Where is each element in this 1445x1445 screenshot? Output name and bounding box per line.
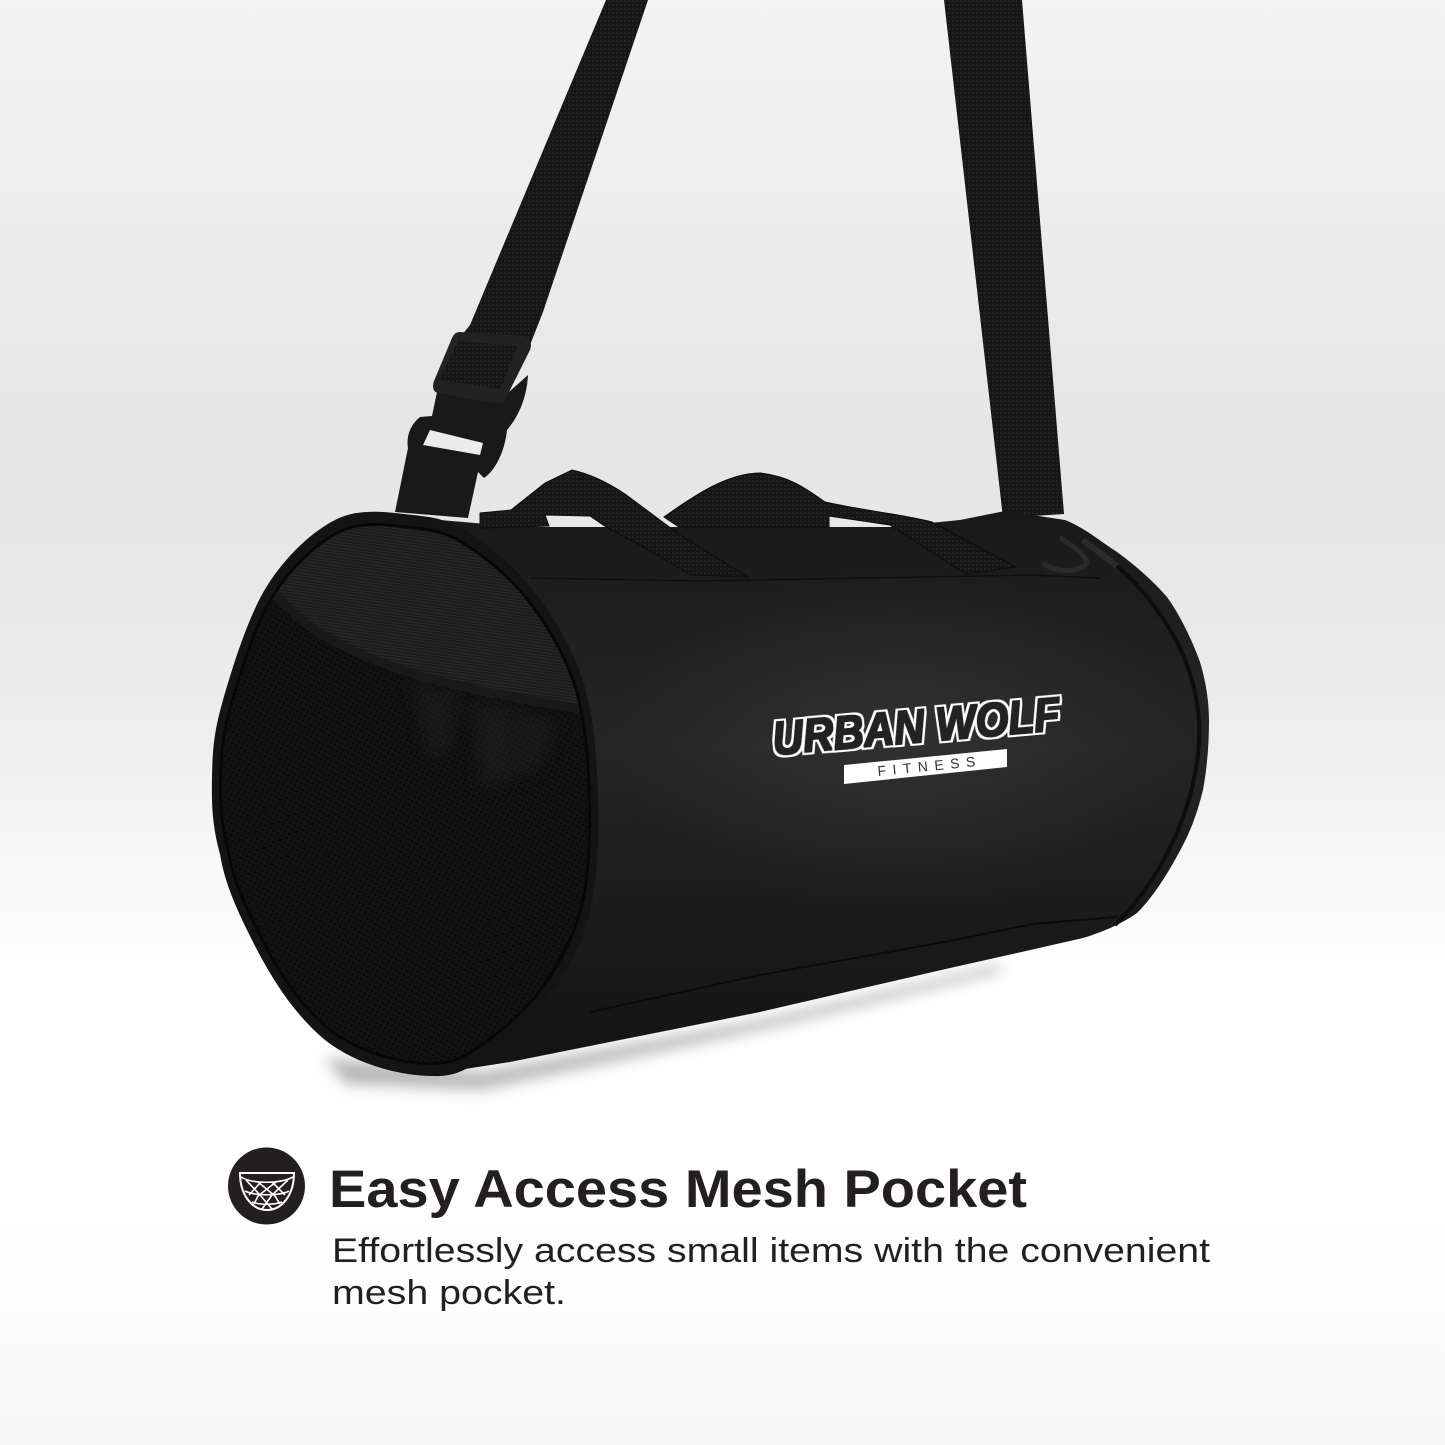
end cap with mesh pocket xyxy=(212,512,598,1076)
cap seam xyxy=(221,524,590,1063)
body lower panel seam xyxy=(590,917,1117,1012)
loop opening xyxy=(423,430,483,455)
pocket hem binding xyxy=(272,590,582,709)
handle one xyxy=(480,470,748,577)
strap through buckle xyxy=(439,341,517,389)
ground shadow xyxy=(325,965,1000,1090)
cap rim xyxy=(212,512,598,1076)
brand logo xyxy=(770,687,1063,784)
mesh fold highlights xyxy=(420,692,548,780)
fitness bar xyxy=(844,749,1007,784)
left shoulder strap xyxy=(462,0,648,345)
feature heading: Easy Access Mesh Pocket xyxy=(329,1160,1027,1219)
feature description: mesh pocket. xyxy=(332,1274,566,1312)
feature icon: mesh net xyxy=(228,1148,305,1224)
upper woven panel xyxy=(272,526,578,704)
fabric highlight on body xyxy=(610,570,1190,910)
right shoulder strap xyxy=(944,0,1064,518)
zipper pulls xyxy=(1043,538,1117,571)
top handles xyxy=(480,470,1016,577)
zipper line xyxy=(530,575,1100,581)
fitness label: FITNESS xyxy=(877,753,982,779)
mesh pocket xyxy=(222,600,588,1062)
bag body cylinder xyxy=(433,511,1209,1074)
logo wordmark: URBAN WOLF xyxy=(770,687,1063,765)
feature description: Effortlessly access small items with the convenient xyxy=(332,1232,1211,1270)
lower strap and ladder loop xyxy=(395,375,528,518)
handle two xyxy=(664,473,1016,574)
cap panels xyxy=(222,526,588,1062)
right end piping xyxy=(1100,552,1199,925)
strap adjuster buckle xyxy=(395,332,531,518)
upper buckle frame xyxy=(433,332,531,404)
